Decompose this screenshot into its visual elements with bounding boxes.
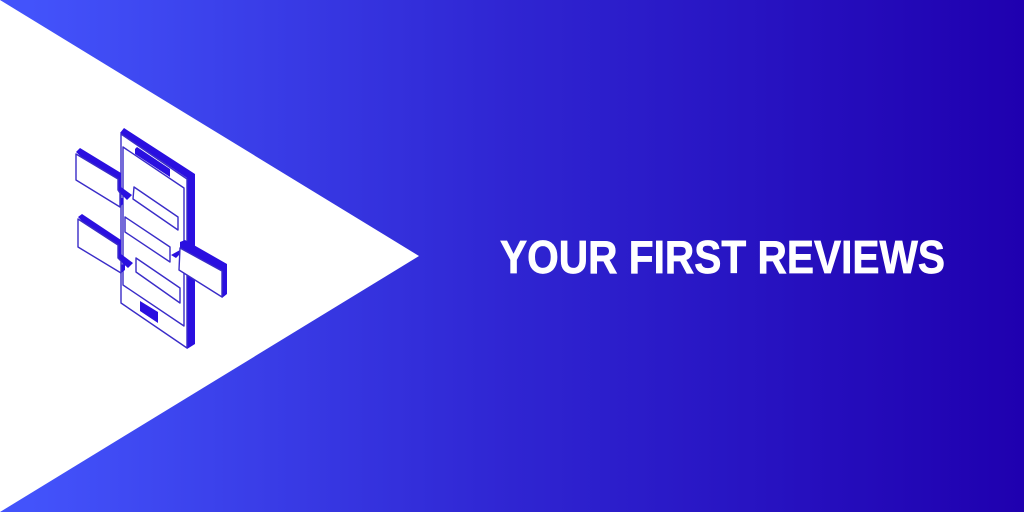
right bubble — [171, 240, 227, 298]
white triangle — [0, 0, 419, 512]
title: YOUR FIRST REVIEWS — [500, 231, 945, 283]
left bubble upper — [76, 148, 132, 207]
phone home button — [140, 301, 158, 323]
phone speaker — [135, 147, 170, 177]
middle review card 3 — [136, 258, 180, 303]
phone body — [120, 128, 195, 349]
middle review card 1 — [133, 187, 178, 230]
left bubble lower — [78, 214, 133, 273]
middle review card 2 — [125, 217, 170, 262]
icon: phone with review bubbles — [76, 128, 227, 349]
